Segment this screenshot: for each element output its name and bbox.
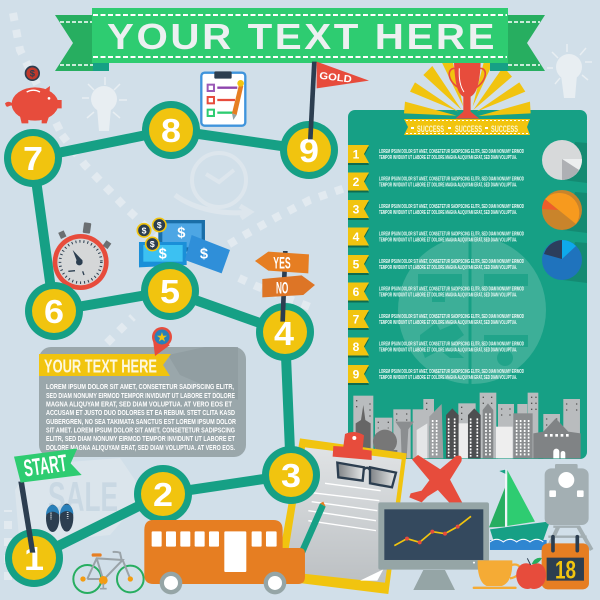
success ribbon: SUCCESS: [455, 124, 482, 135]
start flag: START: [22, 450, 69, 483]
step 8: [348, 338, 524, 358]
step node 2: 2: [153, 476, 173, 513]
icon: airplane: [409, 455, 463, 503]
dashed background route: [8, 13, 345, 580]
step node 7: [4, 129, 62, 187]
success ribbon: SUCCESS: [417, 124, 444, 135]
step 3: 3: [353, 202, 360, 216]
step node 1: 1: [24, 540, 44, 577]
step 9: 9: [353, 368, 360, 382]
icon: money and coins: $: [157, 220, 162, 230]
success ribbon: SUCCESS: [491, 124, 518, 135]
step 4: [348, 228, 524, 248]
icon: signpost: [255, 251, 315, 322]
step 7: 7: [353, 312, 360, 326]
pie chart: orange: [542, 190, 587, 233]
step node 4: [256, 303, 314, 361]
step 3: [348, 200, 524, 220]
step node 3: 3: [281, 457, 301, 494]
icon: signpost: YES: [273, 253, 291, 272]
icon: calendar: [542, 537, 589, 589]
step 2: 2: [353, 175, 360, 189]
watermark: clock: [175, 153, 250, 218]
step 8: 8: [353, 340, 360, 354]
step node 7: 7: [23, 140, 43, 177]
icon: monitor with chart: [378, 502, 489, 590]
step node 5: [141, 262, 199, 320]
icon: signpost: NO: [276, 278, 288, 297]
step 5: [348, 255, 524, 275]
icon: money and coins: $: [150, 239, 155, 249]
panel body text: SED DIAM NONUMY EIRMOD TEMPOR INVIDUNT UT LABORE ET DOLORE: [46, 393, 235, 400]
step node 8: [142, 101, 200, 159]
step 5: 5: [353, 258, 360, 272]
icon: train: [545, 464, 592, 550]
clipboard with glasses: [275, 432, 407, 594]
step node 3: [262, 446, 320, 504]
panel body text: DOLORE MAGNA ALIQUYAM ERAT, SED DIAM VOLUPTUA. AT VERO EOS.: [46, 445, 235, 452]
panel heading ribbon: YOUR TEXT HERE: [44, 356, 157, 376]
step 1: 1: [353, 148, 360, 162]
step node 8: 8: [161, 112, 181, 149]
grey text panel: [39, 347, 246, 457]
panel body text: ELITR, SED DIAM NONUMY EIRMOD TEMPOR INVIDUNT UT LABORE ET: [46, 436, 236, 443]
step node 4: 4: [274, 315, 295, 352]
step node 9: [280, 121, 338, 179]
watermark: globe: [398, 236, 546, 384]
icon: money and coins: [137, 218, 230, 273]
gold flag: GOLD: [319, 71, 352, 86]
icon: money and coins: $: [142, 225, 147, 235]
panel body text: MAGNA ALIQUYAM ERAT, SED DIAM VOLUPTUA. AT VERO EOS ET: [46, 402, 233, 408]
gold flag: [308, 62, 369, 139]
city skyline: [353, 393, 581, 458]
step 9: [348, 365, 524, 385]
step node 5: 5: [160, 273, 180, 310]
watermark: sale tag: SALE: [48, 473, 118, 520]
title: YOUR TEXT HERE: [107, 17, 495, 57]
icon: map pin: ★: [156, 330, 168, 344]
icon: map pin: [152, 327, 172, 356]
icon: shoes: [46, 504, 73, 532]
step node 6: 6: [44, 293, 64, 330]
pie chart: blue: [542, 240, 587, 283]
panel body text: GUBERGREN, NO SEA TAKIMATA SANCTUS EST LOREM IPSUM DOLOR: [46, 419, 236, 426]
panel body text: ACCUSAM ET JUSTO DUO DOLORES ET EA REBUM. STET CLITA KASD: [46, 410, 235, 417]
panel body text: LOREM IPSUM DOLOR SIT AMET, CONSETETUR SADIPSCING ELITR,: [46, 384, 234, 391]
step 1: [348, 145, 524, 165]
step 6: [348, 282, 524, 302]
route connecting steps: [33, 130, 309, 558]
panel body text: [46, 384, 236, 452]
step 6: 6: [353, 285, 360, 299]
step 7: [348, 310, 524, 330]
bus: [144, 520, 305, 594]
icon: coffee cup: [473, 560, 520, 589]
icon: light bulb left: [82, 77, 127, 131]
step 2: [348, 172, 524, 192]
title banner: [55, 8, 545, 71]
icon: sailboat: [489, 469, 550, 550]
pie chart: grey: [542, 140, 587, 183]
step node 2: [134, 465, 192, 523]
start flag: [14, 448, 82, 553]
icon: checklist clipboard: [201, 71, 245, 126]
success ribbon: [404, 119, 530, 135]
icon: light bulb right: [547, 44, 592, 98]
watermark: sale tag: [15, 458, 140, 550]
icon: calendar: 18: [555, 556, 576, 584]
icon: piggy bank: $: [30, 69, 36, 79]
icon: money and coins: $: [177, 226, 185, 242]
step node 6: [25, 282, 83, 340]
icon: money and coins: $: [200, 247, 208, 263]
icon: stopwatch: [53, 222, 111, 290]
icon: bicycle: [73, 552, 144, 593]
trophy with sun rays: [404, 55, 531, 119]
icon: money and coins: $: [159, 247, 167, 263]
icon: apple: [516, 558, 546, 589]
step node 1: [5, 529, 63, 587]
icon: piggy bank: [5, 66, 62, 123]
panel body text: SIT AMET. LOREM IPSUM DOLOR SIT AMET, CONSETETUR SADIPSCING: [46, 428, 235, 434]
step 4: 4: [353, 230, 360, 244]
step node 9: 9: [299, 132, 319, 169]
